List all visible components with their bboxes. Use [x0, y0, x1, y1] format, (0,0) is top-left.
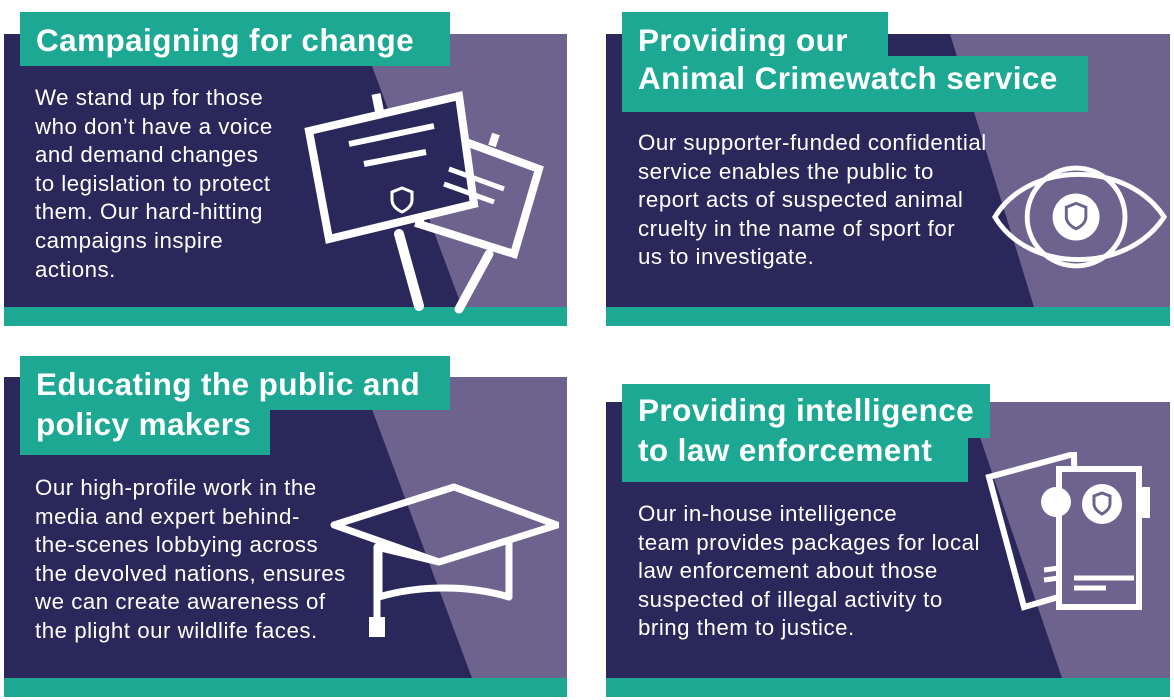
text: intelligence: bring them to justice. — [638, 615, 855, 640]
panel: campaigning — [4, 34, 567, 326]
text: crimewatch: us to investigate. — [638, 244, 814, 269]
panel: educating — [4, 377, 567, 697]
heading: educating — [20, 356, 450, 455]
text: educating: the-scenes lobbying across — [35, 532, 318, 557]
text: intelligence: Our in-house intelligence — [638, 501, 897, 526]
text: to law enforcement — [638, 432, 932, 468]
text: campaigning: campaigns inspire — [35, 228, 223, 253]
text: Providing our — [638, 22, 848, 58]
text: intelligence: team provides packages for local — [638, 530, 980, 555]
text: crimewatch: cruelty in the name of sport for — [638, 216, 955, 241]
text: crimewatch: Our supporter-funded confidential — [638, 130, 987, 155]
text: educating: we can create awareness of — [35, 589, 326, 614]
text: educating — [35, 475, 346, 643]
icon: eye — [992, 166, 1167, 268]
text: campaigning: actions. — [35, 257, 116, 282]
text: crimewatch: service enables the public to — [638, 159, 934, 184]
panel: intelligence — [606, 402, 1170, 697]
text: educating: Our high-profile work in the — [35, 475, 317, 500]
heading: intelligence — [622, 384, 990, 482]
text: crimewatch: report acts of suspected animal — [638, 187, 963, 212]
text: Campaigning for change — [36, 22, 414, 58]
text: Animal Crimewatch service — [638, 60, 1058, 96]
text: Providing intelligence — [638, 392, 974, 428]
text: campaigning: We stand up for those — [35, 85, 263, 110]
text: campaigning: to legislation to protect — [35, 171, 271, 196]
text: educating: the plight our wildlife faces. — [35, 618, 318, 643]
text: campaigning: them. Our hard-hitting — [35, 199, 263, 224]
text: campaigning — [35, 85, 273, 282]
panel: crimewatch — [606, 34, 1170, 326]
text: intelligence: law enforcement about those — [638, 558, 938, 583]
heading: crimewatch — [622, 12, 1088, 112]
text: intelligence — [638, 501, 980, 640]
text: Educating the public and — [36, 366, 420, 402]
text: intelligence: suspected of illegal activity to — [638, 587, 943, 612]
text: educating: media and expert behind- — [35, 504, 300, 529]
text: campaigning: and demand changes — [35, 142, 258, 167]
text: policy makers — [36, 406, 251, 442]
icon: graduation cap — [330, 484, 559, 637]
text: educating: the devolved nations, ensures — [35, 561, 346, 586]
text: campaigning: who don’t have a voice — [35, 114, 273, 139]
icon: placards — [304, 91, 544, 314]
text: crimewatch — [638, 130, 987, 269]
icon: documents — [985, 452, 1150, 611]
